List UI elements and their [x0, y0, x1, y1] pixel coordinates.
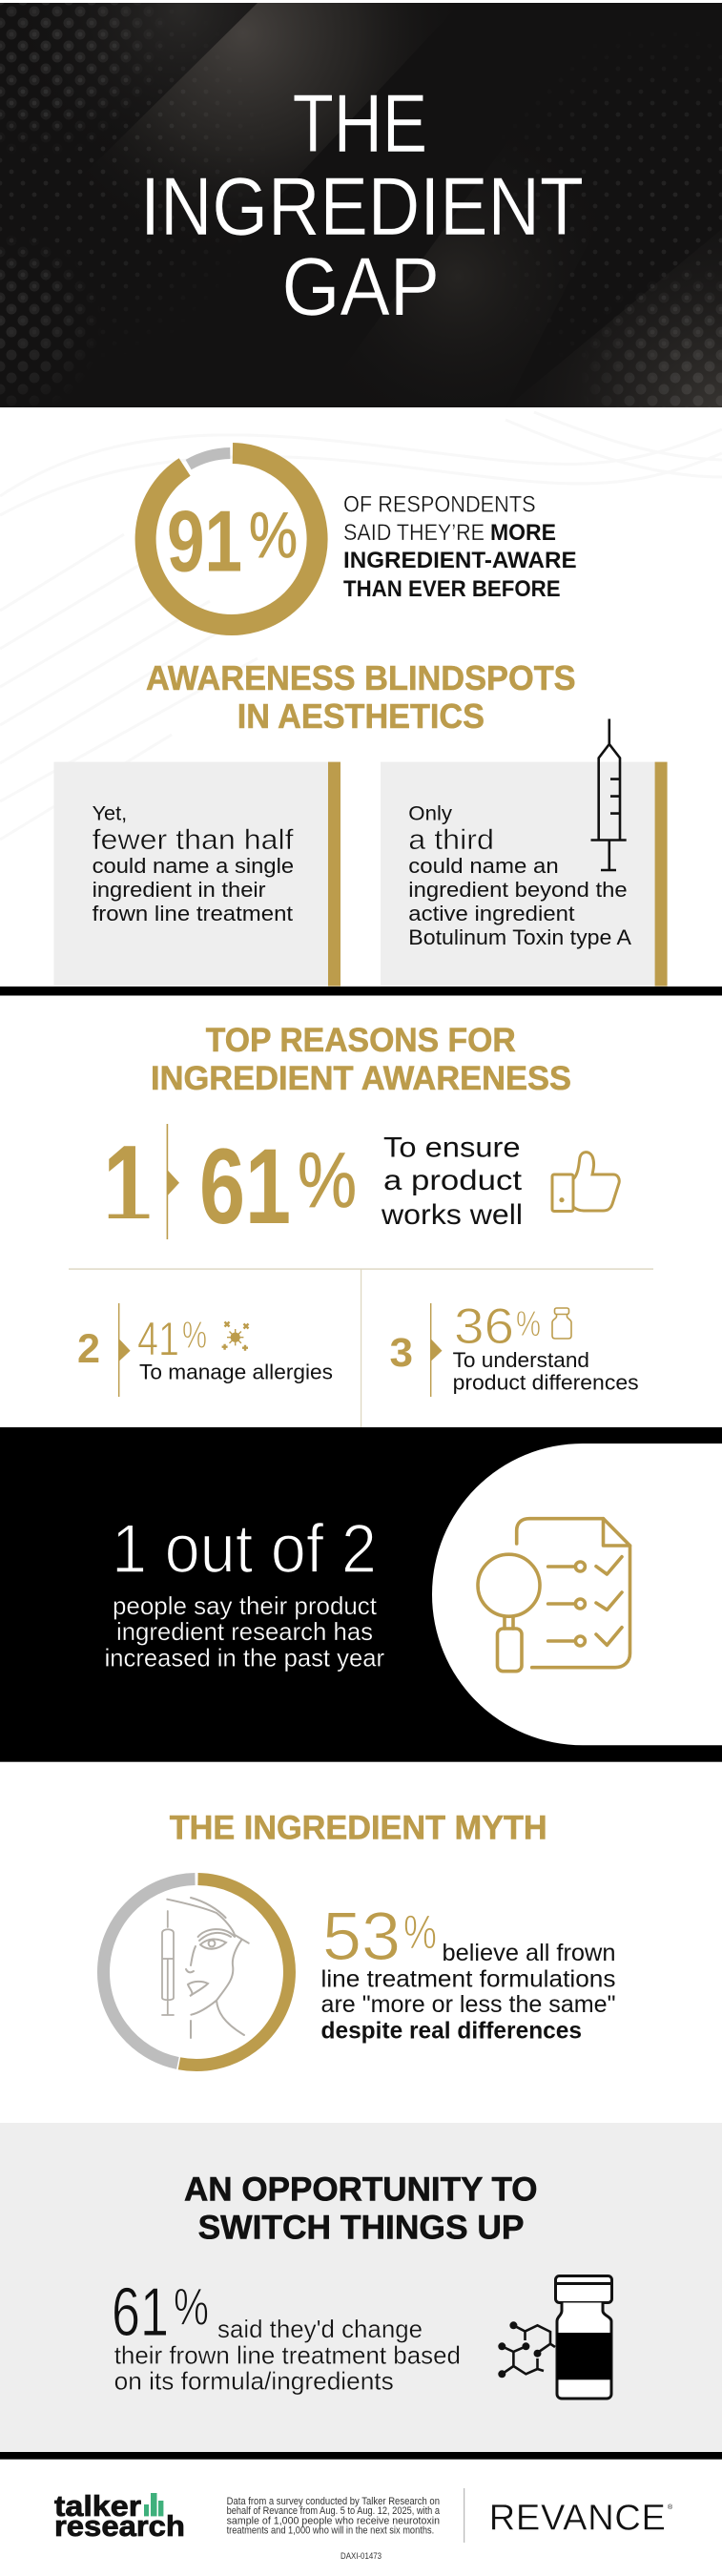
- icon: syringe: [591, 719, 627, 870]
- logo: revance: ®: [668, 2503, 673, 2511]
- text: 53 percent statement: %: [403, 1905, 437, 1959]
- logo: talker research: talker: [54, 2489, 141, 2523]
- text: 53 percent statement: 53: [322, 1900, 401, 1975]
- text: survey methodology: [227, 2496, 440, 2537]
- text: survey methodology: behalf of Revance from Aug. 5 to Aug. 12, 2025, with a: [227, 2505, 440, 2517]
- black divider: [0, 987, 722, 996]
- text: document code: DAXI-01473: [340, 2551, 382, 2561]
- title: THE: [293, 78, 427, 170]
- card: a third: could name an: [408, 854, 559, 878]
- reason 1: 61 percent: 1: [103, 1121, 152, 1251]
- text: 53 percent statement: line treatment formulations: [320, 1965, 616, 1992]
- text: 53 percent statement: believe all frown: [443, 1940, 616, 1966]
- reason 1: 61 percent: a product: [383, 1165, 523, 1196]
- text: survey methodology: sample of 1,000 people who receive neurotoxin: [227, 2516, 440, 2527]
- heading: awareness blindspots: IN AESTHETICS: [237, 696, 485, 736]
- card: a third: a third: [408, 824, 494, 856]
- card: fewer than half: frown line treatment: [93, 902, 293, 925]
- heading: an opportunity: [184, 2171, 538, 2247]
- text: respondents statement: MORE: [490, 520, 556, 546]
- heading: awareness blindspots: [146, 658, 576, 736]
- icon: thumbs up: [552, 1153, 619, 1212]
- text: respondents statement: OF RESPONDENTS: [343, 492, 536, 517]
- logo: talker research: research: [54, 2509, 185, 2543]
- card: fewer than half: Yet,: [93, 803, 127, 824]
- text: 61 percent statement: their frown line treatment based: [114, 2340, 461, 2369]
- stat: 1 out of 2: 1 out of 2: [112, 1511, 377, 1588]
- reason 3: 36 percent: [389, 1298, 639, 1397]
- reason 1: 61 percent: works well: [381, 1199, 523, 1231]
- reason 3: 36 percent: product differences: [453, 1371, 639, 1395]
- text: research description: ingredient research has: [116, 1617, 373, 1646]
- card: a third: active ingredient: [408, 902, 575, 925]
- donut chart: 91 percent: %: [249, 499, 298, 571]
- text: 53 percent statement: [320, 1900, 616, 2045]
- black divider: [0, 2452, 722, 2460]
- donut chart: 53 percent: [103, 1880, 289, 2065]
- panel: hero header: [0, 3, 722, 407]
- icon: document and magnifier: [478, 1519, 629, 1672]
- card: a third: [381, 762, 668, 987]
- reason 2: 41 percent: 2: [77, 1326, 100, 1372]
- text: research description: people say their product: [113, 1591, 378, 1620]
- heading: top reasons: [151, 1022, 571, 1097]
- panel: footer: [54, 2488, 673, 2561]
- card: fewer than half: ingredient in their: [93, 878, 266, 902]
- reason 1: 61 percent: To ensure: [383, 1132, 521, 1163]
- text: research description: [105, 1591, 384, 1672]
- card: a third: Botulinum Toxin type A: [408, 925, 631, 949]
- panel: awareness: [0, 412, 722, 987]
- panel: the ingredient myth: [103, 1810, 616, 2065]
- panel: research: [0, 1427, 722, 1762]
- donut chart: 91 percent: [146, 453, 318, 625]
- reason 2: 41 percent: %: [182, 1315, 207, 1357]
- card: fewer than half: fewer than half: [93, 824, 294, 856]
- text: 53 percent statement: are "more or less the same": [320, 1991, 616, 2018]
- text: 61 percent statement: said they'd change: [217, 2315, 423, 2343]
- reason 2: 41 percent: To manage allergies: [139, 1361, 333, 1384]
- icon: vial: [552, 1308, 571, 1339]
- logo: talker research: [54, 2489, 185, 2543]
- panel: top reasons: [69, 1022, 653, 1427]
- reason 3: 36 percent: To understand: [453, 1348, 589, 1372]
- reason 2: 41 percent: [77, 1303, 333, 1397]
- text: respondents statement: INGREDIENT-AWARE: [343, 548, 577, 573]
- reason 1: 61 percent: %: [298, 1137, 357, 1224]
- heading: awareness blindspots: AWARENESS BLINDSPOTS: [146, 658, 576, 697]
- heading: top reasons: INGREDIENT AWARENESS: [151, 1060, 571, 1097]
- title: [140, 78, 584, 333]
- reason 1: 61 percent: [95, 1121, 619, 1251]
- reason 2: 41 percent: 41: [137, 1313, 179, 1366]
- heading: an opportunity: SWITCH THINGS UP: [198, 2210, 525, 2247]
- text: survey methodology: Data from a survey conducted by Talker Research on: [227, 2496, 440, 2507]
- icon: allergen particles: [222, 1322, 248, 1351]
- text: 61 percent statement: %: [174, 2277, 209, 2337]
- card: a third: Only: [408, 803, 453, 824]
- text: research description: increased in the past year: [105, 1644, 384, 1672]
- reason 3: 36 percent: %: [516, 1304, 541, 1344]
- card: fewer than half: [53, 762, 340, 987]
- text: 61 percent statement: 61: [112, 2275, 169, 2351]
- card: a third: ingredient beyond the: [408, 878, 628, 902]
- heading: the ingredient myth: THE INGREDIENT MYTH: [170, 1810, 547, 1847]
- panel: an opportunity: [0, 2123, 722, 2452]
- text: 61 percent statement: on its formula/ingredients: [114, 2366, 394, 2395]
- title: GAP: [282, 241, 440, 333]
- donut chart: 91 percent: 91: [167, 494, 242, 590]
- heading: an opportunity: AN OPPORTUNITY TO: [184, 2171, 538, 2209]
- title: INGREDIENT: [140, 161, 584, 253]
- text: respondents statement: SAID THEY’RE: [343, 520, 485, 546]
- reason 1: 61 percent: 61: [199, 1127, 291, 1246]
- card: fewer than half: could name a single: [93, 854, 294, 878]
- icon: vial and molecule: [498, 2276, 612, 2399]
- text: survey methodology: treatments and 1,000 who will in the next six months.: [227, 2525, 434, 2537]
- icon: face and syringe: [162, 1898, 249, 2038]
- reason 3: 36 percent: 3: [389, 1330, 413, 1376]
- text: respondents statement: THAN EVER BEFORE: [343, 576, 561, 602]
- reason 3: 36 percent: 36: [454, 1298, 514, 1355]
- heading: top reasons: TOP REASONS FOR: [206, 1022, 516, 1059]
- text: respondents statement: [343, 492, 577, 602]
- text: 61 percent statement: [112, 2275, 461, 2395]
- logo: revance: REVANCE: [489, 2499, 666, 2539]
- text: 53 percent statement: despite real differences: [320, 2018, 582, 2045]
